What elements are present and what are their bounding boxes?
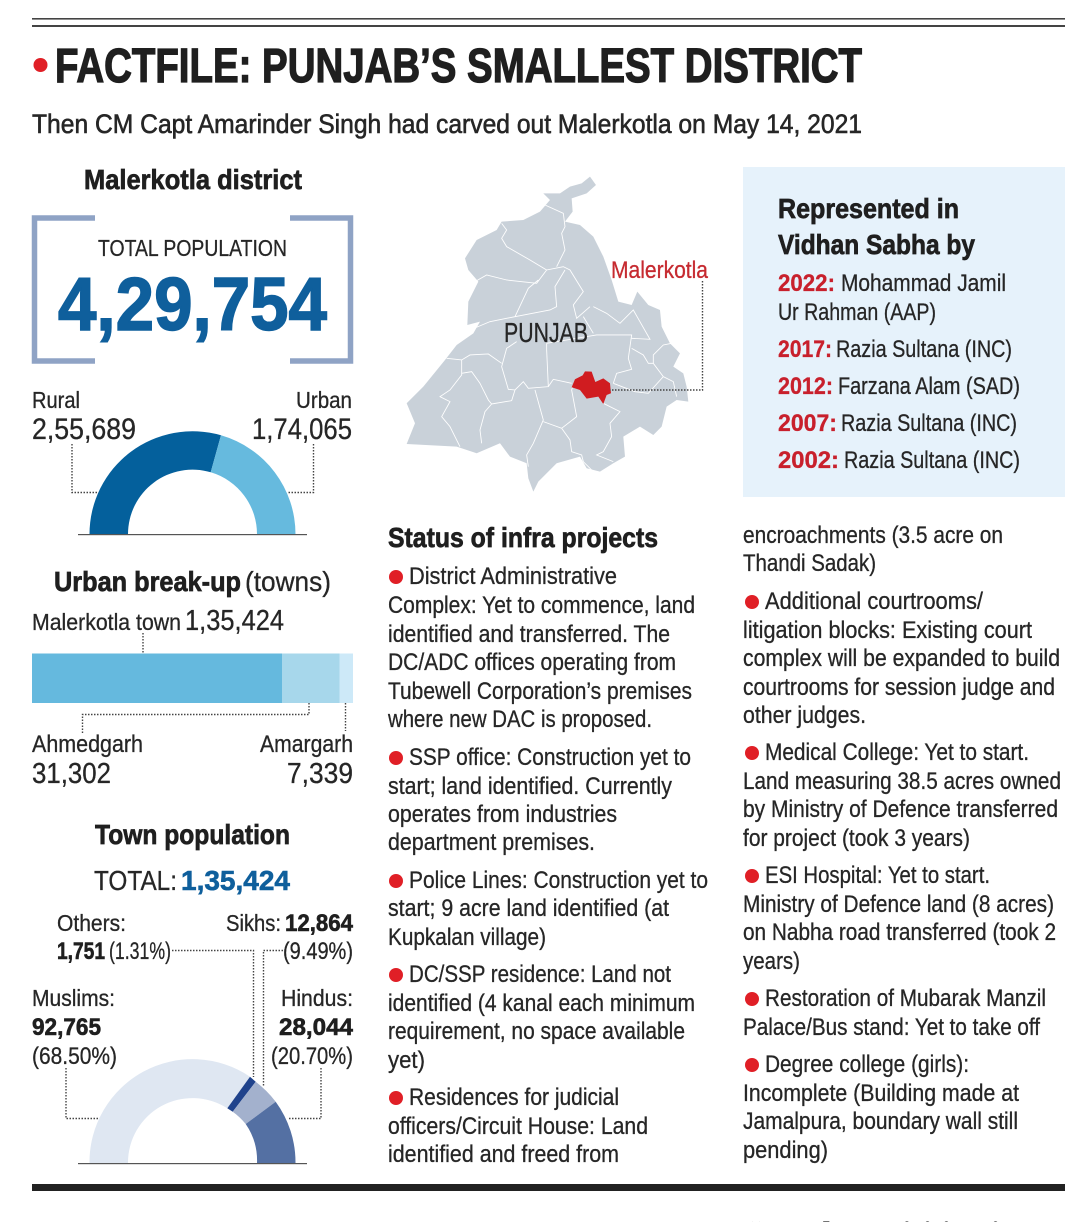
item: District Administrative Complex: Tubewell Corporation’s premises [388, 678, 692, 705]
heading: urban break-up: Urban break-up [54, 566, 241, 597]
total town population: TOTAL: [94, 865, 177, 896]
panel: represented in Vidhan Sabha [743, 167, 1065, 497]
item: District Administrative Complex: District Administrative [409, 563, 617, 590]
label: Others: 1,751 [57, 938, 105, 965]
label: Malerkotla: Malerkotla [611, 257, 709, 284]
rural label: Rural [32, 387, 80, 413]
label: PUNJAB: PUNJAB [504, 317, 588, 348]
item: District Administrative Complex: DC/ADC offices operating from [388, 649, 676, 676]
item: DC/SSP residence: identified (4 kanal each minimum [388, 990, 695, 1017]
item continued: encroachments: Thandi Sadak) [743, 550, 876, 577]
rural label [32, 387, 136, 446]
heading: represented in Vidhan Sabha by: Represented in [778, 193, 959, 224]
entry 2002: 2002: [778, 447, 839, 474]
entry 2022 [778, 270, 1006, 326]
item: Degree college: Incomplete (Building made at [743, 1080, 1019, 1107]
label: Malerkotla town: Malerkotla town [32, 609, 181, 635]
item: Mubarak Manzil Palace: Palace/Bus stand: Yet to take off [743, 1014, 1040, 1041]
label: Hindus: (20.70%) [271, 1043, 353, 1070]
panel: status of infra projects, column two [743, 522, 1061, 1164]
map of Punjab [407, 177, 709, 492]
title: FACTFILE: PUNJAB’S SMALLEST DISTRICT [55, 40, 862, 93]
top double rule [32, 18, 1065, 27]
label: Amargarh [260, 731, 353, 790]
entry 2022: Ur Rahman (AAP) [778, 299, 936, 326]
label: Sikhs: Sikhs: [226, 910, 281, 936]
item: Additional courtrooms [743, 588, 1060, 729]
item: ESI Hospital [743, 862, 1056, 975]
entry 2017 [778, 336, 1012, 363]
Punjab outline [407, 177, 688, 492]
urban label: 1,74,065 [252, 413, 352, 446]
item: DC/SSP residence: requirement, no space available [388, 1018, 685, 1045]
item: Degree college: Jamalpura, boundary wall still [743, 1108, 1018, 1135]
item: Police Lines: start; 9 acre land identified (at [388, 895, 669, 922]
item: SSP office: start; land identified. Currently [388, 773, 672, 800]
heading: Malerkotla district: Malerkotla district [84, 164, 302, 195]
panel: urban break-up [32, 566, 353, 790]
stacked bar [32, 654, 353, 703]
label: Others: Others: [57, 910, 126, 936]
entry 2007: 2007: [778, 410, 837, 437]
entry 2012: 2012: [778, 373, 833, 400]
rural urban half donut [78, 431, 307, 535]
urban label: Urban [296, 387, 352, 413]
item: Mubarak Manzil Palace [743, 985, 1046, 1041]
item continued: encroachments [743, 522, 1003, 577]
heading: status of infra projects: Status of infra projects [388, 522, 658, 553]
leader line [610, 281, 702, 390]
item: Police Lines: Kupkalan village) [388, 924, 546, 951]
label: Others [57, 910, 171, 965]
label: Others: (1.31%) [109, 938, 171, 965]
item: Medical College [743, 739, 1061, 852]
item: DC/SSP residence: yet) [388, 1047, 425, 1074]
entry 2017: Razia Sultana (INC) [836, 336, 1012, 363]
item continued: encroachments: encroachments (3.5 acre on [743, 522, 1003, 549]
item: Degree college: Degree college (girls): [765, 1051, 969, 1078]
entry 2002: Razia Sultana (INC) [844, 447, 1020, 474]
item: DC/SSP residence [388, 961, 695, 1074]
total population frame [34, 218, 350, 361]
total town population: 1,35,424 [181, 865, 290, 896]
item: District Administrative Complex: Complex: Yet to commence, land [388, 592, 695, 619]
entry 2012: Farzana Alam (SAD) [838, 373, 1020, 400]
label: Muslims: Muslims: [32, 985, 115, 1011]
label: Muslims: 92,765 [32, 1014, 101, 1041]
label: Amargarh: Amargarh [260, 731, 353, 758]
item: Residences for judicial officers: officers/Circuit House: Land [388, 1113, 648, 1140]
heading: town population: Town population [95, 819, 290, 850]
big number: 4,29,754 [58, 262, 327, 346]
item: ESI Hospital: ESI Hospital: Yet to start. [765, 862, 990, 889]
label: Muslims: (68.50%) [32, 1043, 117, 1070]
item: Additional courtrooms: other judges. [743, 702, 866, 729]
item: Residences for judicial officers: Residences for judicial [409, 1084, 619, 1111]
label: Muslims [32, 985, 117, 1070]
urban label [252, 387, 352, 446]
heading: represented in Vidhan Sabha by [778, 193, 975, 260]
item: Additional courtrooms: courtrooms for session judge and [743, 674, 1055, 701]
heading: represented in Vidhan Sabha by: Vidhan Sabha by [778, 229, 975, 260]
item: Degree college: pending) [743, 1137, 828, 1164]
label: Amargarh: 7,339 [287, 758, 353, 790]
district boundaries [440, 205, 677, 472]
item: SSP office: SSP office: Construction yet to [409, 744, 691, 771]
label: Malerkotla town [32, 605, 284, 637]
label: Sikhs [226, 910, 354, 965]
Malerkotla district highlight [572, 371, 611, 404]
entry 2022: Mohammad Jamil [841, 270, 1006, 297]
item: Medical College: for project (took 3 years) [743, 825, 970, 852]
leader lines [82, 633, 346, 734]
rural label: 2,55,689 [32, 413, 136, 446]
entry 2007 [778, 410, 1017, 437]
entry 2002 [778, 447, 1020, 474]
panel: status of infra projects, column one [387, 522, 708, 1168]
label: Ahmedgarh [32, 731, 143, 790]
label: Ahmedgarh: 31,302 [32, 758, 111, 790]
item: Medical College: Medical College: Yet to start. [765, 739, 1029, 766]
item: DC/SSP residence: DC/SSP residence: Land not [409, 961, 671, 988]
label: Hindus [271, 985, 354, 1070]
label: Hindus: Hindus: [281, 985, 353, 1011]
panel: town population [32, 819, 354, 1164]
entry 2007: Razia Sultana (INC) [841, 410, 1017, 437]
panel: Malerkotla district population [32, 164, 352, 535]
item: District Administrative Complex: identified and transferred. The [388, 621, 670, 648]
leader lines [66, 950, 321, 1118]
total town population [94, 865, 290, 896]
item: District Administrative Complex: where new DAC is proposed. [387, 706, 652, 733]
item: Mubarak Manzil Palace: Restoration of Mubarak Manzil [765, 985, 1046, 1012]
leader lines [72, 444, 314, 492]
heading: urban break-up: (towns) [245, 566, 331, 597]
item: Additional courtrooms: litigation blocks: Existing court [743, 617, 1032, 644]
label: Hindus: 28,044 [279, 1014, 354, 1041]
item: Residences for judicial officers: identified and freed from [388, 1141, 619, 1168]
item: SSP office: operates from industries [388, 801, 617, 828]
item: District Administrative Complex [387, 563, 695, 733]
label: Sikhs: (9.49%) [283, 938, 353, 965]
label: total population: TOTAL POPULATION [98, 235, 287, 261]
item: ESI Hospital: years) [743, 948, 800, 975]
item: Police Lines: Police Lines: Construction yet to [409, 867, 708, 894]
subtitle: Then CM Capt Amarinder Singh had carved out Malerkotla on May 14, 2021 [32, 109, 862, 139]
entry 2017: 2017: [778, 336, 832, 363]
entry 2012 [778, 373, 1020, 400]
entry 2022: 2022: [778, 270, 835, 297]
item: SSP office [388, 744, 691, 856]
item: SSP office: department premises. [388, 829, 595, 856]
label: Malerkotla town: 1,35,424 [185, 605, 284, 637]
label: Sikhs: 12,864 [285, 910, 354, 937]
item: Degree college [743, 1051, 1019, 1164]
item: Additional courtrooms: Additional courtrooms/ [765, 588, 983, 615]
bottom rule [32, 1184, 1065, 1191]
item: Residences for judicial officers [388, 1084, 648, 1168]
item: Police Lines [388, 867, 708, 951]
label: Ahmedgarh: Ahmedgarh [32, 731, 143, 758]
community half donut [78, 1059, 307, 1164]
